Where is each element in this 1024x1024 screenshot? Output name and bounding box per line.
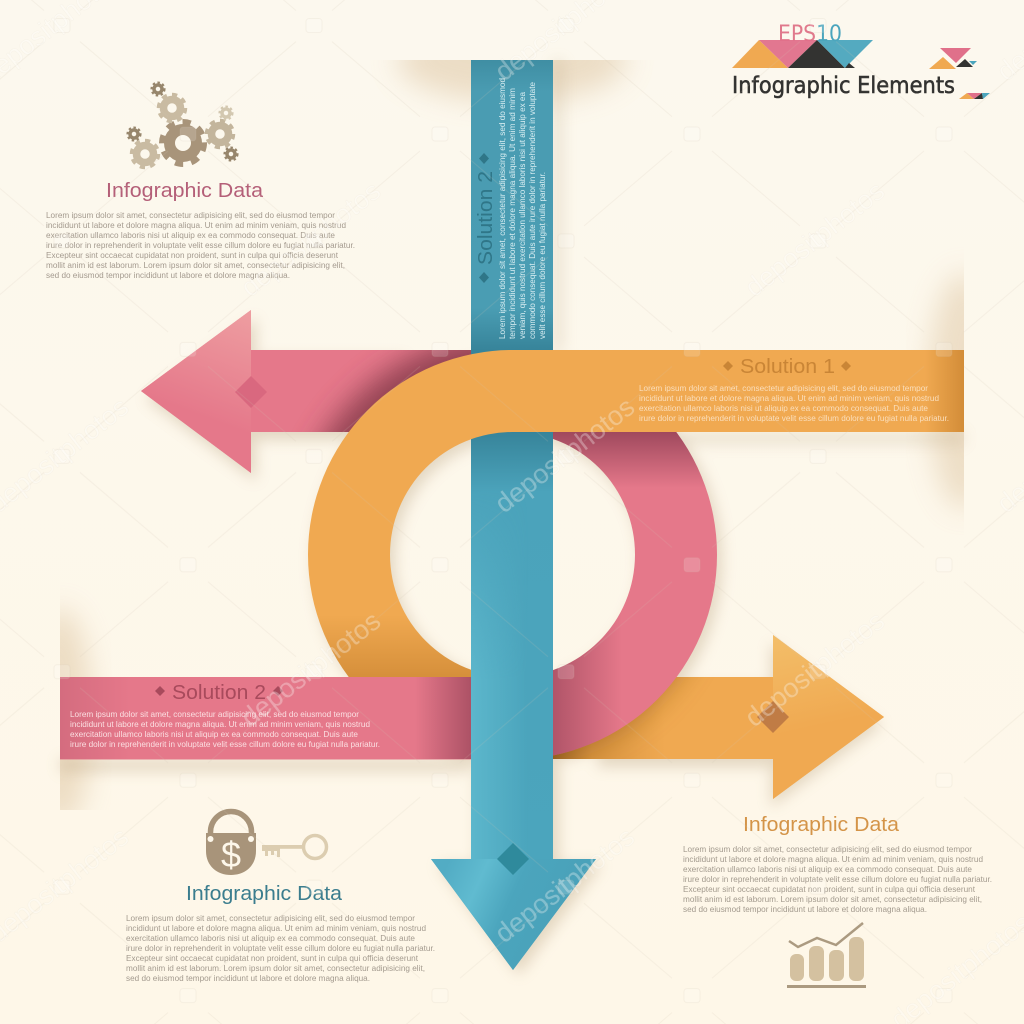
text block: vertical body text: commodo consequat. Duis aute irure dolor in reprehenderit in voluptate bbox=[527, 82, 537, 339]
text block: top left body: Excepteur sint occaecat cupidatat non proident, sunt in culpa qui officia deserunt bbox=[46, 250, 339, 260]
text block: solution 2 body: incididunt ut labore et dolore magna aliqua. Ut enim ad minim veniam, quis nostrud bbox=[70, 719, 370, 729]
text block: bottom right body: Lorem ipsum dolor sit amet, consectetur adipisicing elit, sed do eiusmod tempor bbox=[683, 844, 972, 854]
panel: bottom left infographic data bbox=[126, 812, 435, 983]
watermark text: depositphotos bbox=[739, 176, 890, 303]
arrow: pink ribbon with ring pointing left bbox=[60, 310, 734, 777]
panel: teal solution 2 text bbox=[475, 78, 547, 339]
panel: solution 1 band text bbox=[639, 356, 949, 423]
icon: large triangle row bbox=[732, 40, 873, 68]
text block: top left body: irure dolor in reprehenderit in voluptate velit esse cillum dolore eu fugiat nulla pariatur. bbox=[46, 240, 355, 250]
icon: padlock with dollar sign: $ bbox=[221, 834, 241, 875]
icon: pink arrow diamond bbox=[235, 376, 267, 408]
text block: bottom left body: incididunt ut labore et dolore magna aliqua. Ut enim ad minim veniam, quis nostrud bbox=[126, 923, 426, 933]
text block: solution 2 body bbox=[70, 709, 380, 749]
text block: bottom right body: exercitation ullamco laboris nisi ut aliquip ex ea commodo consequat. Duis aute bbox=[683, 864, 972, 874]
text block: solution 1 body: irure dolor in reprehenderit in voluptate velit esse cillum dolore eu fugiat nulla pariatur. bbox=[639, 413, 949, 423]
heading: solution 2 vertical: Solution 2 bbox=[475, 171, 497, 265]
text block: vertical body text: tempor incididunt ut labore et dolore magna aliqua. Ut enim ad minim bbox=[507, 88, 517, 339]
text block: bottom left body: Lorem ipsum dolor sit amet, consectetur adipisicing elit, sed do eiusmod tempor bbox=[126, 913, 415, 923]
heading: solution 2: Solution 2 bbox=[172, 682, 266, 704]
arrow: orange upper band and arc bbox=[308, 350, 964, 555]
icon: key bbox=[262, 836, 326, 858]
watermark text: depositphotos bbox=[235, 606, 386, 733]
watermark text: depositphotos bbox=[235, 176, 386, 303]
text block: bottom left body: Excepteur sint occaecat cupidatat non proident, sunt in culpa qui officia deserunt bbox=[126, 953, 419, 963]
text block: top left body: incididunt ut labore et dolore magna aliqua. Ut enim ad minim veniam, quis nostrud bbox=[46, 220, 346, 230]
title: EPS10 with triangles and Infographic Elements bbox=[732, 22, 990, 99]
icon: teal arrow diamond bbox=[497, 843, 529, 875]
heading: infographic data teal: Infographic Data bbox=[186, 883, 343, 905]
icon: bar and line chart bbox=[787, 923, 866, 988]
text block: vertical body text: veniam, quis nostrud exercitation ullamco laboris nisi ut aliquip ex ea bbox=[517, 92, 527, 339]
text block: top left body: sed do eiusmod tempor incididunt ut labore et dolore magna aliqua. bbox=[46, 270, 290, 280]
watermark text: depositphotos bbox=[489, 822, 640, 949]
arrow: teal vertical ribbon pointing down bbox=[431, 60, 596, 970]
text block: bottom left body: sed do eiusmod tempor incididunt ut labore et dolore magna aliqua. bbox=[126, 973, 370, 983]
heading: Infographic Elements: Infographic Elements bbox=[732, 73, 955, 99]
text block: solution 1 body: exercitation ullamco laboris nisi ut aliquip ex ea commodo consequat. Duis aute bbox=[639, 403, 928, 413]
text block: solution 2 body: exercitation ullamco laboris nisi ut aliquip ex ea commodo consequat. Duis aute bbox=[70, 729, 358, 739]
text block: bottom right body bbox=[683, 844, 992, 914]
heading: infographic data orange: Infographic Data bbox=[743, 814, 900, 836]
shadow under arrows and ring bbox=[60, 60, 964, 975]
text block: top left body: mollit anim id est laborum. Lorem ipsum dolor sit amet, consectetur adipisicing elit, bbox=[46, 260, 345, 270]
text block: bottom right body: sed do eiusmod tempor incididunt ut labore et dolore magna aliqua. bbox=[683, 904, 927, 914]
heading: solution 1: Solution 1 bbox=[740, 356, 835, 378]
text block: bottom right body: Excepteur sint occaecat cupidatat non proident, sunt in culpa qui officia deserunt bbox=[683, 884, 976, 894]
text block: top left body: exercitation ullamco laboris nisi ut aliquip ex ea commodo consequat. Duis aute bbox=[46, 230, 335, 240]
text block: solution 2 body: Lorem ipsum dolor sit amet, consectetur adipisicing elit, sed do eiusmod tempor bbox=[70, 709, 359, 719]
watermark text: depositphotos bbox=[739, 606, 890, 733]
text block: bottom left body: exercitation ullamco laboris nisi ut aliquip ex ea commodo consequat. Duis aute bbox=[126, 933, 415, 943]
text block: solution 1 body: Lorem ipsum dolor sit amet, consectetur adipisicing elit, sed do eiusmod tempor bbox=[639, 383, 928, 393]
label: EPS10: EPS10 bbox=[778, 22, 842, 47]
icon: small triangle cluster bbox=[929, 48, 977, 69]
panel: solution 2 strip text bbox=[70, 682, 380, 749]
text block: vertical body text: velit esse cillum dolore eu fugiat nulla pariatur. bbox=[537, 172, 547, 339]
text block: solution 1 body: incididunt ut labore et dolore magna aliqua. Ut enim ad minim veniam, quis nostrud bbox=[639, 393, 939, 403]
heading: solution 2 vertical bbox=[475, 153, 497, 283]
text block: bottom left body: irure dolor in reprehenderit in voluptate velit esse cillum dolore eu fugiat nulla pariatur. bbox=[126, 943, 435, 953]
text block: bottom right body: mollit anim id est laborum. Lorem ipsum dolor sit amet, consectetur adipisicing elit, bbox=[683, 894, 982, 904]
text block: vertical body text: Lorem ipsum dolor sit amet, consectetur adipisicing elit, sed do eiusmod bbox=[497, 78, 507, 339]
panel: bottom right infographic data bbox=[683, 814, 992, 988]
icon: padlock with dollar sign bbox=[206, 812, 256, 875]
heading: solution 2 bbox=[155, 682, 283, 704]
text block: top left body: Lorem ipsum dolor sit amet, consectetur adipisicing elit, sed do eiusmod tempor bbox=[46, 210, 335, 220]
watermark text: depositphotos bbox=[489, 392, 640, 519]
icon: small triangle strip bbox=[959, 93, 990, 99]
heading: infographic data pink: Infographic Data bbox=[106, 180, 264, 202]
arrow: orange lower section pointing right bbox=[308, 555, 884, 799]
text block: solution 2 body: irure dolor in reprehenderit in voluptate velit esse cillum dolore eu fugiat nulla pariatur. bbox=[70, 739, 380, 749]
heading: solution 1 bbox=[723, 356, 851, 378]
text block: bottom left body: mollit anim id est laborum. Lorem ipsum dolor sit amet, consectetur adipisicing elit, bbox=[126, 963, 425, 973]
icon: orange arrow diamond bbox=[757, 701, 789, 733]
text block: solution 1 body bbox=[639, 383, 949, 423]
text block: top left body bbox=[46, 210, 355, 280]
text block: bottom right body: irure dolor in reprehenderit in voluptate velit esse cillum dolore eu fugiat nulla pariatur. bbox=[683, 874, 992, 884]
icon: gears bbox=[128, 83, 237, 167]
text block: bottom left body bbox=[126, 913, 435, 983]
text block: vertical body text bbox=[497, 78, 547, 339]
panel: top left infographic data bbox=[46, 83, 355, 280]
text block: bottom right body: incididunt ut labore et dolore magna aliqua. Ut enim ad minim veniam, quis nostrud bbox=[683, 854, 983, 864]
